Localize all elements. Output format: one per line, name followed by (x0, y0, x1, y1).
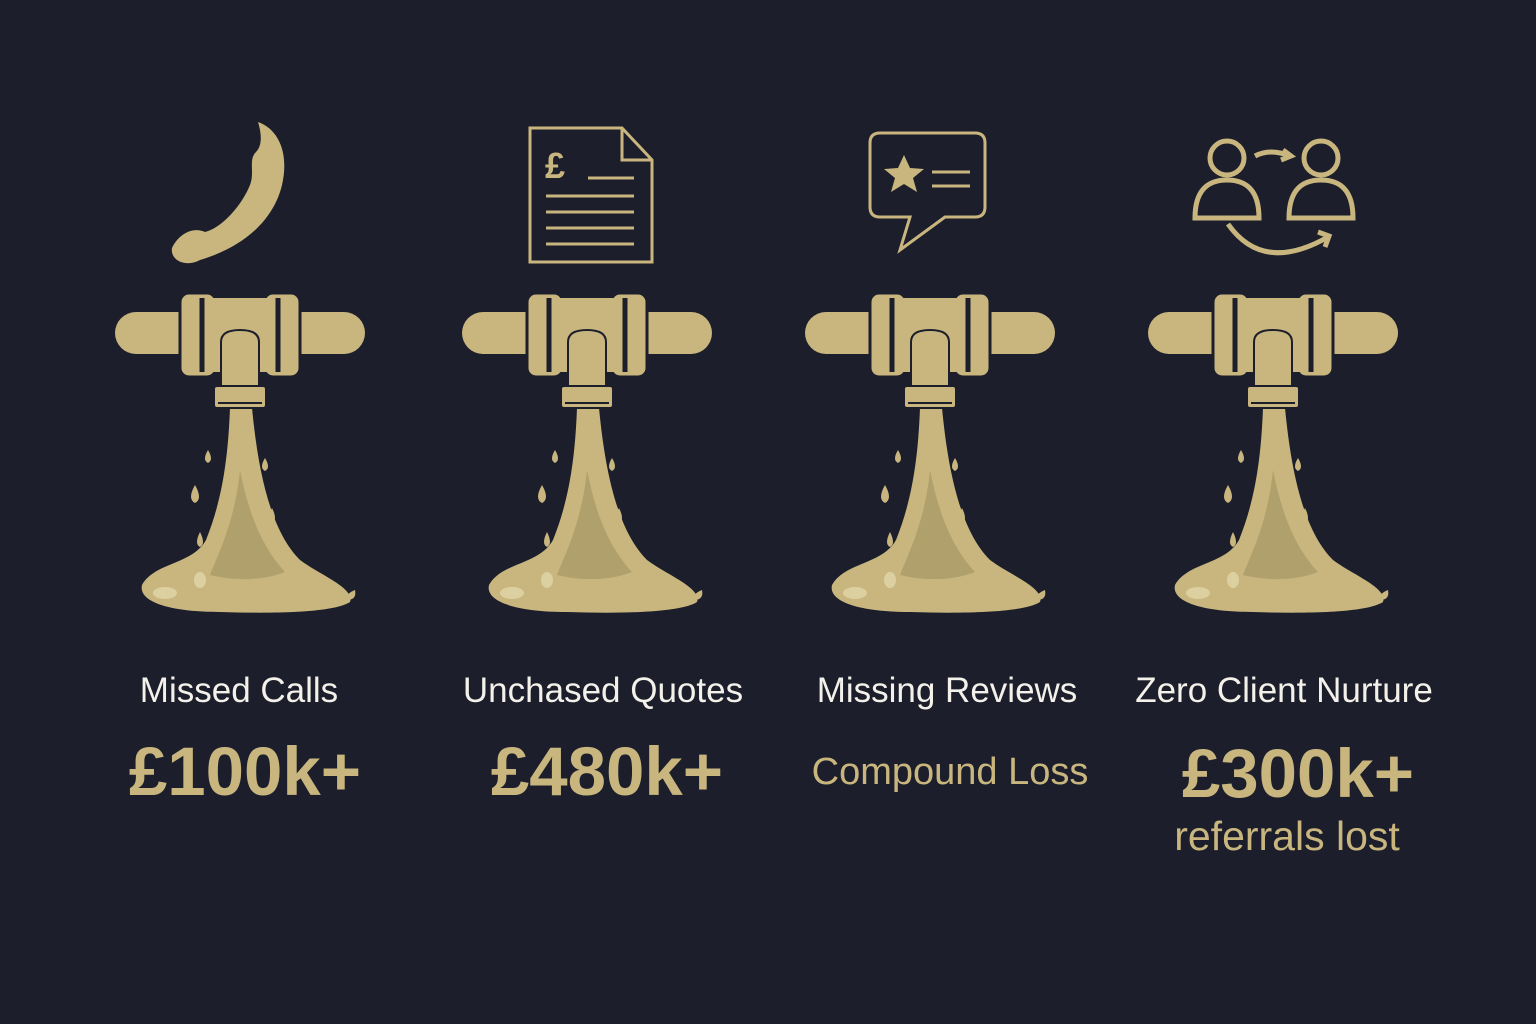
icon: referral people (1195, 141, 1353, 253)
icon: quote document: £ (545, 145, 565, 186)
value: 100k: £100k+ (129, 733, 361, 810)
pipe 2 (462, 293, 712, 613)
value: 300k referrals: referrals lost (1174, 813, 1400, 859)
label: unchased quotes: Unchased Quotes (463, 671, 743, 710)
value: compound loss: Compound Loss (812, 751, 1088, 793)
label: missed calls: Missed Calls (140, 671, 338, 710)
label: zero client nurture: Zero Client Nurture (1135, 671, 1433, 710)
icon: quote document (530, 128, 652, 262)
value: 480k: £480k+ (491, 733, 723, 810)
pipe 4 (1148, 293, 1398, 613)
icon: phone (172, 122, 284, 263)
pipe 3 (805, 293, 1055, 613)
value: 300k referrals: £300k+ (1182, 735, 1414, 812)
label: missing reviews: Missing Reviews (817, 671, 1077, 710)
icon: review bubble (870, 133, 985, 250)
value: 300k referrals (1174, 735, 1414, 859)
pipe 1 (115, 293, 365, 613)
